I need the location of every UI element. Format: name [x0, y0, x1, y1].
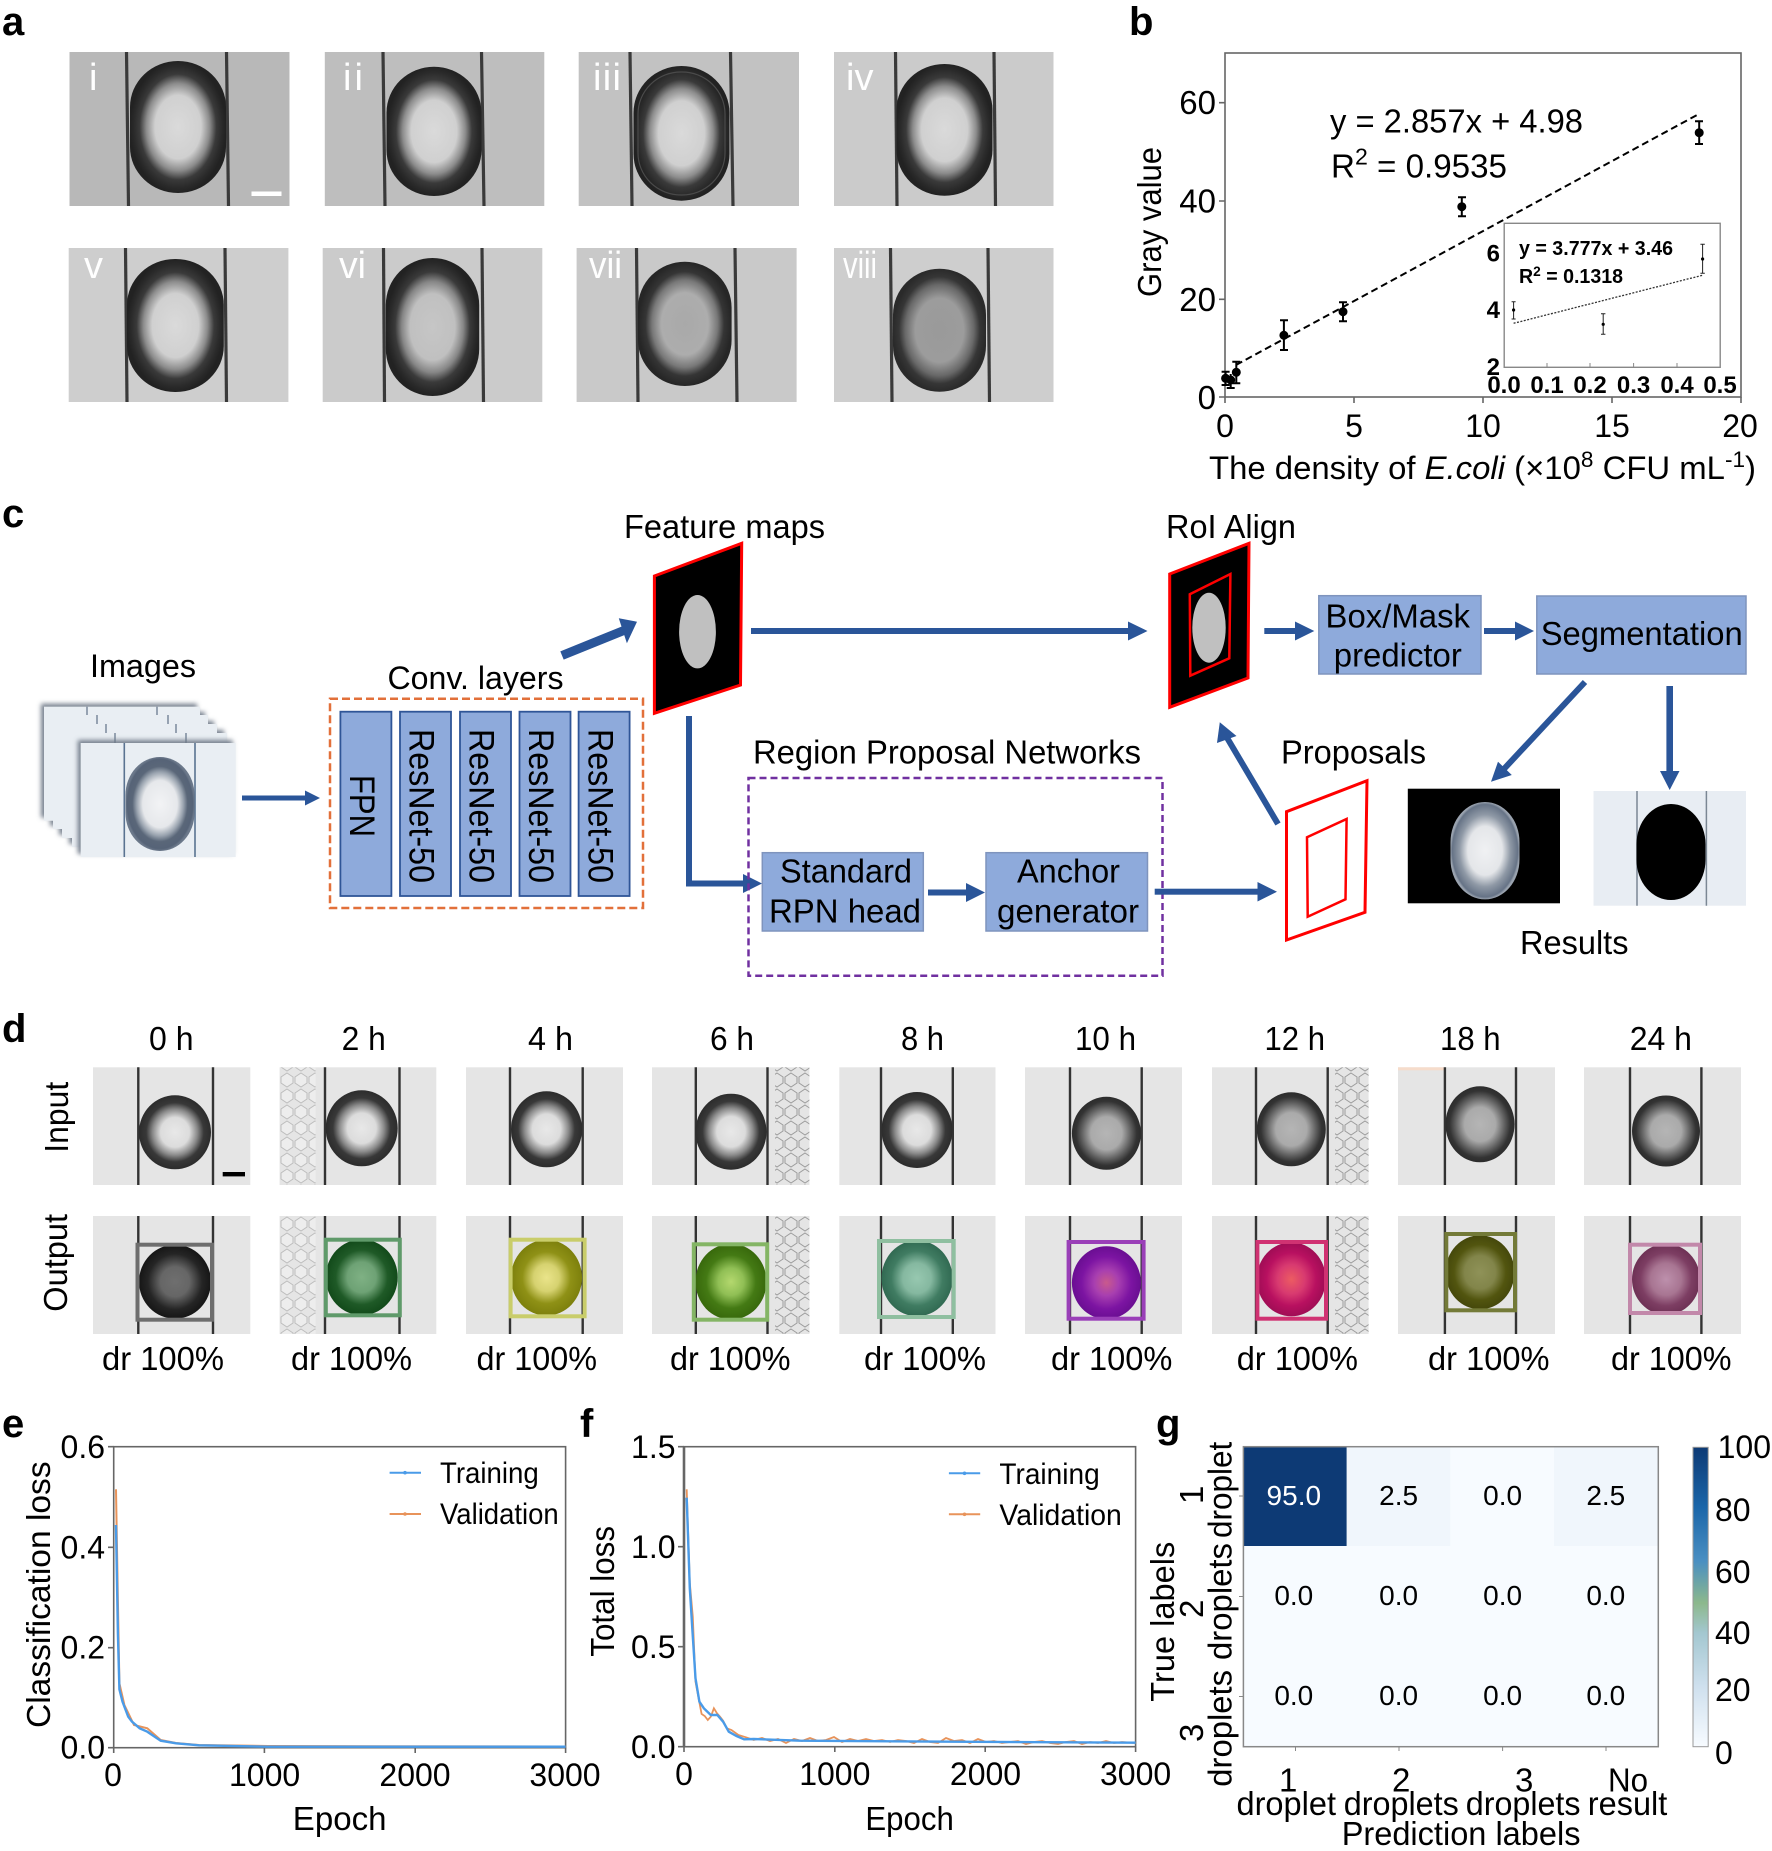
heatmap values: 95.0: [1267, 1480, 1321, 1511]
x tick labels: 1000: [799, 1756, 870, 1792]
time labels: 24 h: [1630, 1020, 1692, 1057]
input image 0 h: [93, 1067, 250, 1185]
y tick labels: [631, 1429, 676, 1765]
result image: black mask: [1594, 791, 1746, 906]
detection rate labels: dr 100%: [1611, 1340, 1732, 1377]
x tick labels: 2: [1392, 1762, 1410, 1799]
arrow predictor to segmentation: [1484, 622, 1534, 640]
arrow to conv layers: [242, 790, 320, 806]
heatmap values: 0.0: [1274, 1580, 1313, 1611]
colour bar labels: 0: [1715, 1735, 1733, 1771]
x tick labels: droplet: [1236, 1785, 1336, 1822]
arrow RoI to box predictor: [1264, 622, 1314, 640]
image v: [69, 245, 288, 402]
y axis title: Total loss: [584, 1526, 621, 1657]
colour bar labels: [1715, 1429, 1771, 1771]
y tick labels: 2: [1173, 1600, 1210, 1618]
Standard RPN head block: [762, 853, 923, 931]
x axis tick labels: 20: [1722, 408, 1758, 444]
Region Proposal Networks label: Region Proposal Networks: [753, 734, 1141, 770]
panel c: network architecture diagram: [2, 492, 1746, 976]
x axis title: Epoch: [293, 1800, 386, 1837]
y tick labels: droplet: [1202, 1442, 1239, 1538]
x tick labels: 0: [675, 1756, 693, 1792]
y tick labels: 3: [1173, 1724, 1210, 1742]
x tick labels: [675, 1756, 1171, 1792]
panel label a: a: [2, 0, 25, 44]
time labels: 10 h: [1075, 1020, 1136, 1057]
image ii: [325, 52, 544, 206]
y tick labels: 0.0: [631, 1729, 676, 1765]
Anchor generator block: generator: [997, 893, 1139, 930]
y tick labels: 0.6: [61, 1429, 105, 1465]
y axis tick labels: 60: [1179, 84, 1216, 121]
legend: Training: [440, 1457, 539, 1490]
image vi: [323, 245, 542, 402]
x tick labels: 3000: [529, 1757, 601, 1793]
r squared: = 0.9535: [1368, 148, 1507, 184]
legend: [390, 1457, 559, 1531]
colour bar labels: 40: [1715, 1615, 1751, 1651]
RoI Align label: RoI Align: [1166, 508, 1296, 545]
colour bar labels: 60: [1715, 1554, 1751, 1590]
RoI plane: [1170, 543, 1249, 707]
training curve: [116, 1525, 566, 1747]
y axis title: Classification loss: [20, 1461, 57, 1728]
Box/Mask predictor block: [1319, 596, 1481, 674]
x tick labels: 3: [1515, 1762, 1533, 1799]
x tick labels: [104, 1757, 601, 1793]
inset chart: [1487, 223, 1737, 399]
heatmap values: 0.0: [1483, 1580, 1522, 1611]
y tick labels: droplets: [1202, 1670, 1239, 1787]
time labels: 8 h: [901, 1020, 944, 1057]
arrow segmentation to cropped result: [1491, 682, 1585, 782]
Proposals label: Proposals: [1281, 734, 1426, 770]
arrow feature maps to RoI: [751, 622, 1148, 640]
colour bar labels: 80: [1715, 1492, 1751, 1528]
output image 24 h: [1584, 1216, 1741, 1334]
inset chart: 2: [1487, 354, 1500, 381]
FPN block: [340, 712, 391, 896]
y axis tick labels: 0: [1198, 379, 1216, 416]
inset chart: 0.5: [1703, 372, 1737, 399]
x axis tick labels: 10: [1465, 408, 1501, 444]
output image 2 h: [280, 1216, 436, 1334]
detection rate labels: dr 100%: [1428, 1340, 1550, 1377]
inset chart: 0.0: [1487, 372, 1521, 399]
input image 10 h: [1025, 1067, 1182, 1185]
y axis tick labels: [1179, 84, 1216, 416]
plot frame and ticks: [678, 1447, 1136, 1752]
ResNet-50 block 3: ResNet-50: [521, 729, 560, 883]
time labels: 6 h: [710, 1020, 754, 1057]
ResNet-50 block 3: [520, 712, 570, 896]
x axis title: Epoch: [865, 1800, 954, 1837]
inset chart: 0.1: [1530, 372, 1564, 399]
panel b: calibration scatter chart: [1129, 0, 1758, 486]
y tick labels: 0.5: [631, 1629, 676, 1665]
image viii: viii: [843, 245, 877, 287]
Anchor generator block: [986, 853, 1148, 931]
Feature maps label: Feature maps: [624, 508, 825, 545]
x axis tick labels: 15: [1594, 408, 1630, 444]
output image 18 h: [1398, 1216, 1555, 1334]
detection rate labels: dr 100%: [476, 1340, 597, 1377]
result image: droplet on black: [1408, 789, 1560, 903]
equation: y = 2.857x + 4.98: [1330, 102, 1583, 140]
x tick labels: 1000: [229, 1757, 300, 1793]
input image 4 h: [466, 1067, 623, 1185]
validation curve: [116, 1489, 566, 1746]
inset chart: y = 3.777x + 3.46: [1519, 238, 1673, 260]
x tick labels: droplets: [1344, 1785, 1459, 1822]
feature map plane: [654, 543, 742, 713]
time labels: 18 h: [1440, 1020, 1501, 1057]
Results label: Results: [1520, 924, 1628, 961]
x axis tick labels: 5: [1345, 408, 1363, 444]
panel g: confusion matrix: [1144, 1402, 1771, 1851]
inset chart: 2: [1533, 263, 1541, 279]
panel a: droplet micrographs: [2, 0, 1054, 402]
time labels: 12 h: [1264, 1020, 1325, 1057]
input image 18 h: [1398, 1067, 1555, 1185]
y tick labels: 1.0: [631, 1529, 676, 1565]
x tick labels: 3000: [1100, 1756, 1171, 1792]
x axis title: Prediction labels: [1342, 1815, 1580, 1851]
FPN block: FPN: [342, 775, 381, 837]
output image 8 h: [839, 1216, 996, 1334]
y tick labels: 0.2: [61, 1630, 105, 1666]
x axis title: The density of E.coli (×10: [1209, 450, 1579, 486]
heatmap values: 0.0: [1586, 1680, 1625, 1711]
fit line: [1236, 115, 1697, 365]
y tick labels: [1173, 1442, 1239, 1787]
input image 8 h: [839, 1067, 996, 1185]
legend: Training: [999, 1458, 1100, 1491]
legend: Validation: [999, 1499, 1122, 1532]
connector to RPN head: [689, 716, 762, 893]
inset chart: R: [1519, 266, 1533, 288]
ResNet-50 block 4: ResNet-50: [580, 729, 620, 883]
time labels: 0 h: [149, 1020, 194, 1057]
image vi: vi: [339, 245, 366, 287]
x axis tick labels: 0: [1216, 408, 1234, 444]
output image 4 h: [466, 1216, 623, 1334]
ResNet-50 block 1: [400, 712, 451, 896]
panel label d: d: [2, 1007, 26, 1051]
arrow proposals to RoI: [1217, 722, 1278, 824]
ResNet-50 block 1: ResNet-50: [402, 729, 440, 883]
plot frame and ticks: [108, 1447, 566, 1753]
validation curve: [687, 1489, 1136, 1744]
Segmentation block: Segmentation: [1541, 615, 1743, 652]
x tick labels: 2000: [379, 1757, 451, 1793]
arrow segmentation to mask result: [1660, 686, 1680, 790]
inset chart: = 0.1318: [1541, 266, 1623, 288]
x tick labels: No: [1608, 1762, 1648, 1799]
x tick labels: droplets: [1466, 1785, 1580, 1822]
image i: [70, 52, 290, 206]
x tick labels: 1: [1279, 1762, 1297, 1799]
panel label c: c: [2, 492, 24, 536]
Images label: Images: [90, 648, 196, 684]
arrow RPN to anchor: [928, 883, 985, 902]
panel label e: e: [2, 1402, 24, 1446]
r squared: R: [1331, 148, 1355, 184]
image v: v: [84, 245, 103, 287]
y tick labels: [61, 1429, 105, 1766]
heatmap values: 0.0: [1274, 1680, 1313, 1711]
legend: Validation: [440, 1498, 559, 1531]
image iii: iii: [593, 57, 621, 99]
x axis title: ): [1745, 450, 1756, 486]
input image 6 h: [652, 1067, 809, 1185]
image vii: [577, 245, 797, 402]
panel label b: b: [1129, 0, 1153, 44]
y tick labels: 0.0: [61, 1730, 105, 1766]
Box/Mask predictor block: Box/Mask: [1326, 598, 1470, 635]
detection rate labels: dr 100%: [1237, 1340, 1358, 1377]
detection rate labels: [102, 1340, 1732, 1377]
time labels: [149, 1020, 1692, 1057]
x axis title: 8: [1581, 447, 1593, 472]
plot frame and ticks: [1219, 53, 1741, 403]
image iii: [579, 52, 799, 206]
colour bar: [1693, 1447, 1708, 1747]
proposals planes: [1286, 781, 1367, 940]
heatmap values: 0.0: [1483, 1480, 1522, 1511]
image iv: [834, 52, 1054, 206]
heatmap values: 0.0: [1379, 1680, 1418, 1711]
ResNet-50 block 4: [579, 712, 630, 896]
y tick labels: 1: [1173, 1486, 1210, 1504]
row label output: Output: [37, 1214, 74, 1312]
x axis title: -1: [1725, 447, 1745, 472]
arrow anchor to proposals: [1155, 882, 1277, 902]
detection rate labels: dr 100%: [102, 1340, 224, 1377]
r squared: 2: [1355, 144, 1368, 170]
Anchor generator block: Anchor: [1017, 853, 1120, 890]
heatmap values: [1267, 1480, 1625, 1711]
output image 12 h: [1212, 1216, 1369, 1334]
image vii: vii: [589, 245, 622, 287]
panel label f: f: [580, 1402, 594, 1446]
ResNet-50 block 2: ResNet-50: [462, 729, 500, 883]
colour bar labels: 20: [1715, 1672, 1751, 1708]
RPN dashed box: [748, 778, 1162, 976]
output image 6 h: [652, 1216, 809, 1334]
conv layers dashed box: [330, 699, 643, 908]
detection rate labels: dr 100%: [670, 1340, 790, 1377]
y axis title: Gray value: [1131, 147, 1168, 297]
data points with error bars: [1222, 121, 1703, 388]
x tick labels: [1236, 1762, 1667, 1822]
inset chart: 4: [1487, 297, 1501, 324]
output image 10 h: [1025, 1216, 1182, 1334]
input image 2 h: [280, 1067, 436, 1185]
time labels: 2 h: [342, 1020, 386, 1057]
image viii: [834, 245, 1054, 402]
x axis tick labels: [1216, 408, 1758, 444]
training curve: [687, 1498, 1136, 1743]
image ii: ii: [343, 57, 363, 99]
x tick labels: 0: [104, 1757, 122, 1793]
x tick labels: result: [1588, 1785, 1667, 1822]
x axis title: CFU mL: [1593, 450, 1725, 486]
y tick labels: droplets: [1202, 1543, 1239, 1660]
y tick labels: 1.5: [631, 1429, 676, 1465]
row label input: Input: [38, 1082, 75, 1153]
y axis title: True labels: [1144, 1542, 1181, 1702]
image i: i: [89, 57, 97, 99]
legend: [949, 1458, 1122, 1532]
colour bar labels: 100: [1718, 1429, 1771, 1465]
time labels: 4 h: [528, 1020, 573, 1057]
y axis tick labels: 20: [1179, 281, 1216, 318]
input image 24 h: [1584, 1067, 1741, 1185]
heatmap values: 0.0: [1379, 1580, 1418, 1611]
heatmap values: 0.0: [1483, 1680, 1522, 1711]
arrow to feature maps: [562, 618, 637, 656]
x tick labels: 2000: [950, 1756, 1021, 1792]
inset chart: 0.2: [1573, 372, 1607, 399]
Standard RPN head block: Standard: [780, 853, 912, 890]
panel label g: g: [1156, 1402, 1180, 1446]
Standard RPN head block: RPN head: [769, 893, 921, 930]
input image 12 h: [1212, 1067, 1369, 1185]
inset chart: 0.4: [1660, 372, 1694, 399]
inset chart: 0.3: [1617, 372, 1650, 399]
Box/Mask predictor block: predictor: [1334, 636, 1462, 674]
heatmap values: 2.5: [1586, 1480, 1625, 1511]
ResNet-50 block 2: [460, 712, 511, 896]
panel f: total loss chart: [580, 1402, 1171, 1837]
Segmentation block: [1537, 596, 1746, 674]
output image 0 h: [93, 1216, 250, 1334]
inset chart: 6: [1487, 240, 1500, 268]
detection rate labels: dr 100%: [1051, 1340, 1172, 1377]
heatmap values: 0.0: [1586, 1580, 1625, 1611]
detection rate labels: dr 100%: [864, 1340, 986, 1377]
Conv. layers label: Conv. layers: [388, 660, 564, 696]
y axis tick labels: 40: [1179, 182, 1216, 220]
y tick labels: 0.4: [61, 1530, 105, 1566]
image stack: [44, 707, 236, 857]
heatmap values: 2.5: [1379, 1480, 1418, 1511]
heatmap cells: [1239, 1447, 1658, 1751]
image iv: iv: [846, 57, 873, 99]
panel e: classification loss chart: [2, 1402, 601, 1837]
panel d: time-course detection results: [2, 1007, 1741, 1377]
detection rate labels: dr 100%: [291, 1340, 412, 1377]
